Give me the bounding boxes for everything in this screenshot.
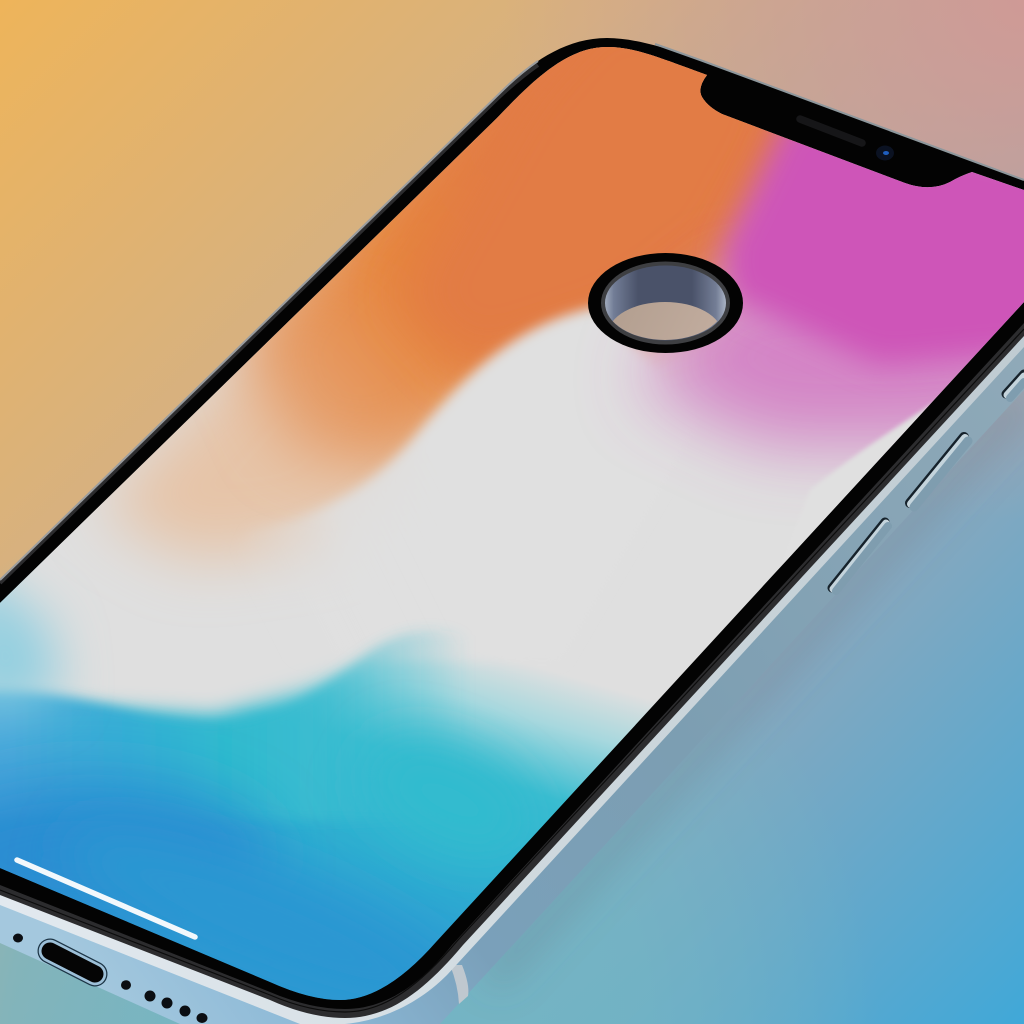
hole floor showing surface bbox=[612, 302, 717, 340]
microphone hole bbox=[13, 934, 23, 942]
lower blue glow bbox=[92, 854, 443, 1000]
peach glow bbox=[100, 290, 500, 560]
hole grey rim bbox=[601, 262, 730, 344]
left teal glow bbox=[0, 560, 60, 720]
upper volume button bbox=[910, 437, 968, 507]
deep blue glow bbox=[0, 780, 270, 930]
magenta lower fade bbox=[640, 260, 1024, 445]
grey inner rim on the left edge bbox=[0, 65, 538, 583]
white lower left bridge bbox=[0, 494, 373, 724]
hole inner wall bbox=[605, 266, 726, 340]
dark bezel band bbox=[0, 300, 1024, 1018]
side switch button bbox=[1006, 374, 1024, 398]
white lower right crest bbox=[778, 399, 934, 570]
charging port bbox=[50, 951, 95, 974]
thin bezel groove line bbox=[0, 329, 1024, 1012]
bottom seam antenna band bbox=[450, 965, 468, 1004]
phone body side bbox=[0, 300, 1024, 1024]
notch camera bbox=[876, 146, 894, 160]
speaker grille holes bbox=[121, 980, 208, 1023]
hole outer black ring bbox=[588, 253, 743, 353]
silver frame band bbox=[0, 300, 1024, 1024]
magenta core bbox=[722, 110, 1024, 365]
white swoosh crest bbox=[262, 300, 650, 662]
punch-hole ring bbox=[588, 253, 743, 353]
orange core top bbox=[444, 47, 790, 360]
lower volume button bbox=[832, 522, 888, 591]
phone shadow on the surface bbox=[490, 398, 1024, 980]
home indicator bar bbox=[17, 860, 195, 937]
orange wave bbox=[240, 0, 880, 470]
notch speaker bbox=[800, 119, 862, 143]
top rim highlight bbox=[655, 44, 1024, 180]
teal soft glow bbox=[392, 710, 550, 876]
teal sharp edge bbox=[0, 630, 480, 820]
left rim highlight bbox=[0, 61, 538, 580]
